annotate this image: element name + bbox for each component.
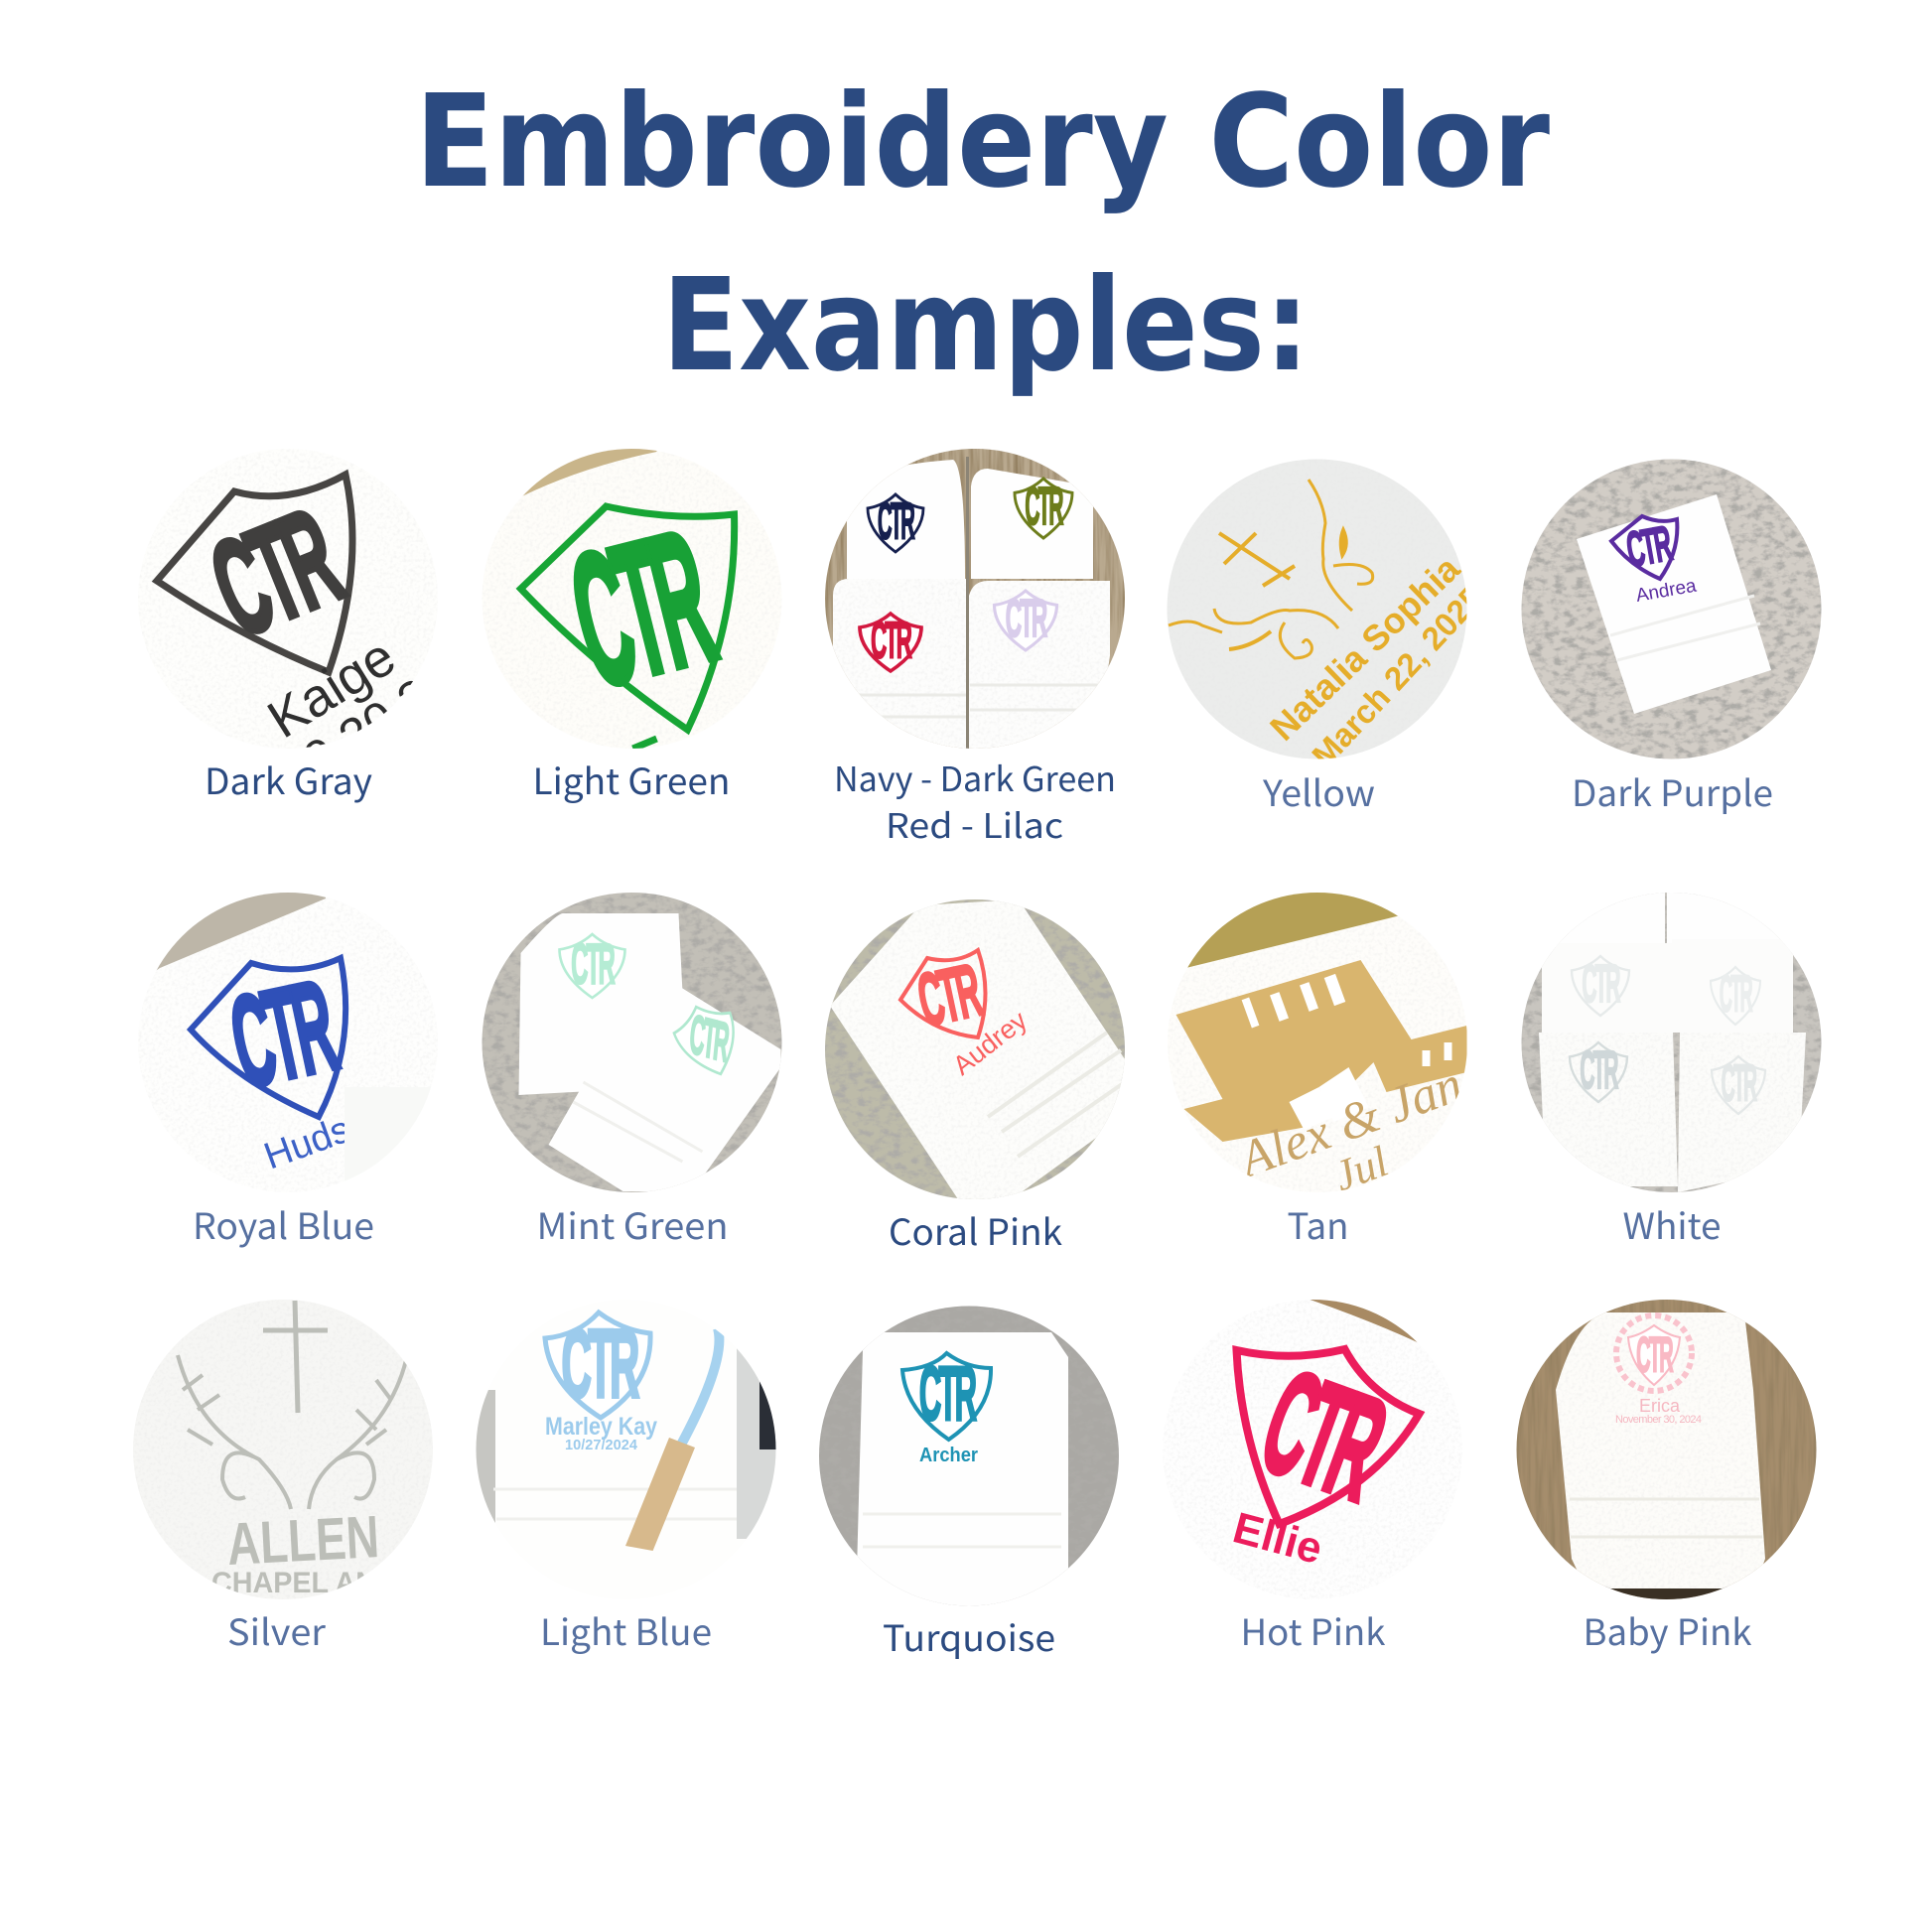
icon: dark green shield: CTR — [1025, 476, 1063, 536]
icon: turquoise shield — [902, 1352, 991, 1440]
photo: yellow embroidery: March 22, 2025 — [1305, 579, 1490, 774]
photo: yellow embroidery: Natalia Sophia — [1262, 547, 1468, 749]
label: Light Blue — [540, 1604, 712, 1656]
icon: faint shield upper right: CTR — [1720, 966, 1753, 1024]
photo: baby pink towel on wood: November 30, 2024 — [1615, 1414, 1702, 1426]
photo: silver embroidery: CHAPEL AN — [211, 1567, 376, 1599]
panel: tan — [1168, 893, 1469, 1250]
photo: dark gray embroidery: CTR — [193, 480, 359, 666]
icon: lilac shield — [995, 589, 1056, 650]
icon: pink shield with laurels — [1616, 1315, 1692, 1391]
icon: faint shield lower left — [1570, 1039, 1627, 1102]
title: Embroidery Color — [415, 68, 1550, 216]
panel: mint green — [483, 893, 782, 1250]
label: Royal Blue — [193, 1198, 374, 1250]
photo: light blue embroidery with tag — [476, 1300, 778, 1599]
icon: mint shield lower: CTR — [687, 1003, 732, 1074]
label: Baby Pink — [1583, 1604, 1752, 1656]
photo: yellow embroidery — [1168, 459, 1467, 759]
label: Dark Purple — [1572, 765, 1773, 817]
photo: four towels — [825, 449, 1125, 749]
label: Light Green — [532, 754, 731, 805]
icon: mint shield upper — [560, 932, 625, 998]
photo: coral pink towel: Audrey — [947, 1005, 1034, 1081]
panel: silver — [133, 1300, 433, 1656]
panel: white — [1521, 893, 1823, 1250]
label: Dark Gray — [205, 754, 372, 805]
label: Coral Pink — [889, 1204, 1062, 1256]
icon: navy shield — [868, 492, 923, 552]
photo: silver embroidery: ALLEN — [225, 1503, 380, 1578]
label: Tan — [1287, 1198, 1348, 1250]
icon: turquoise shield: CTR — [919, 1352, 977, 1437]
icon: pink shield with laurels: CTR — [1636, 1328, 1673, 1383]
panel: navy, dark green, red, lilac — [825, 449, 1125, 848]
photo: towel on gray rug — [1521, 459, 1823, 760]
photo: dark gray embroidery: 0 20 24 — [294, 652, 464, 787]
label: Red - Lilac — [886, 799, 1063, 848]
icon: faint shield upper right — [1711, 966, 1760, 1025]
photo: turquoise towel on rug: Archer — [919, 1445, 978, 1466]
icon: light blue shield: CTR — [562, 1310, 639, 1418]
label: Turquoise — [883, 1610, 1055, 1662]
label: Yellow — [1262, 765, 1375, 817]
icon: faint shield lower right: CTR — [1722, 1054, 1757, 1113]
photo: royal blue embroidery: CTR — [219, 954, 346, 1116]
photo: tan embroidery: Alex & Jan — [1229, 1056, 1469, 1189]
label: Mint Green — [536, 1198, 729, 1250]
icon: navy shield: CTR — [878, 492, 915, 551]
label: Navy - Dark Green — [834, 753, 1116, 801]
panel: baby pink — [1516, 1300, 1818, 1656]
label: Silver — [227, 1604, 327, 1656]
panel: light blue — [476, 1300, 778, 1656]
photo: royal blue embroidery: Hudson — [259, 1094, 395, 1177]
photo: baby pink towel on wood: Erica — [1639, 1396, 1681, 1416]
panel: dark gray — [138, 449, 464, 805]
icon: faint shield upper left — [1572, 953, 1629, 1016]
panel: yellow — [1168, 459, 1467, 806]
icon: faint shield upper left: CTR — [1582, 953, 1620, 1014]
photo: hot pink embroidery: CTR — [1244, 1339, 1404, 1531]
icon: dark green shield — [1015, 476, 1072, 538]
photo: white on white towels — [1521, 893, 1823, 1192]
title — [415, 68, 1550, 400]
photo: two towels on rug — [483, 893, 782, 1192]
photo: silver embroidery — [133, 1300, 433, 1599]
photo: light blue embroidery with tag: 10/27/2024 — [565, 1437, 638, 1453]
panel: light green — [483, 449, 782, 805]
photo: hot pink embroidery: Ellie — [1228, 1503, 1327, 1574]
photo: light green embroidery — [483, 449, 782, 749]
icon: coral shield: CTR — [911, 949, 988, 1042]
photo: royal blue embroidery — [138, 893, 444, 1196]
photo: coral pink towel — [825, 899, 1125, 1199]
photo: turquoise towel on rug — [818, 1306, 1120, 1608]
photo: light blue embroidery with tag: Marley Kay — [545, 1413, 657, 1441]
icon: lilac shield: CTR — [1006, 589, 1047, 648]
photo: dark gray embroidery — [139, 451, 437, 749]
icon: faint shield lower right — [1712, 1054, 1765, 1114]
panel: hot pink — [1162, 1300, 1463, 1656]
panel: royal blue — [138, 893, 444, 1250]
label — [834, 753, 1116, 848]
icon: red shield — [860, 612, 921, 671]
panel: dark purple — [1521, 459, 1823, 817]
icon: mint shield upper: CTR — [571, 932, 615, 996]
photo: hot pink embroidery — [1162, 1300, 1463, 1599]
photo: tan embroidery: Jul — [1327, 1137, 1394, 1200]
photo: tan embroidery — [1168, 893, 1469, 1200]
panel: coral pink — [825, 899, 1125, 1256]
photo: baby pink towel on wood — [1516, 1300, 1818, 1600]
photo: dark gray embroidery: Kaige — [258, 626, 405, 750]
icon: faint shield lower left: CTR — [1580, 1039, 1618, 1100]
photo: towel on gray rug: Andrea — [1634, 576, 1699, 607]
icon: mint shield lower — [673, 1005, 735, 1076]
title: Examples: — [662, 251, 1310, 400]
label: White — [1622, 1198, 1722, 1250]
icon: purple shield: CTR — [1622, 516, 1676, 578]
panel: turquoise — [818, 1306, 1120, 1662]
icon: red shield: CTR — [871, 612, 912, 669]
photo: light green embroidery: CTR — [554, 491, 730, 728]
label: Hot Pink — [1241, 1604, 1386, 1656]
